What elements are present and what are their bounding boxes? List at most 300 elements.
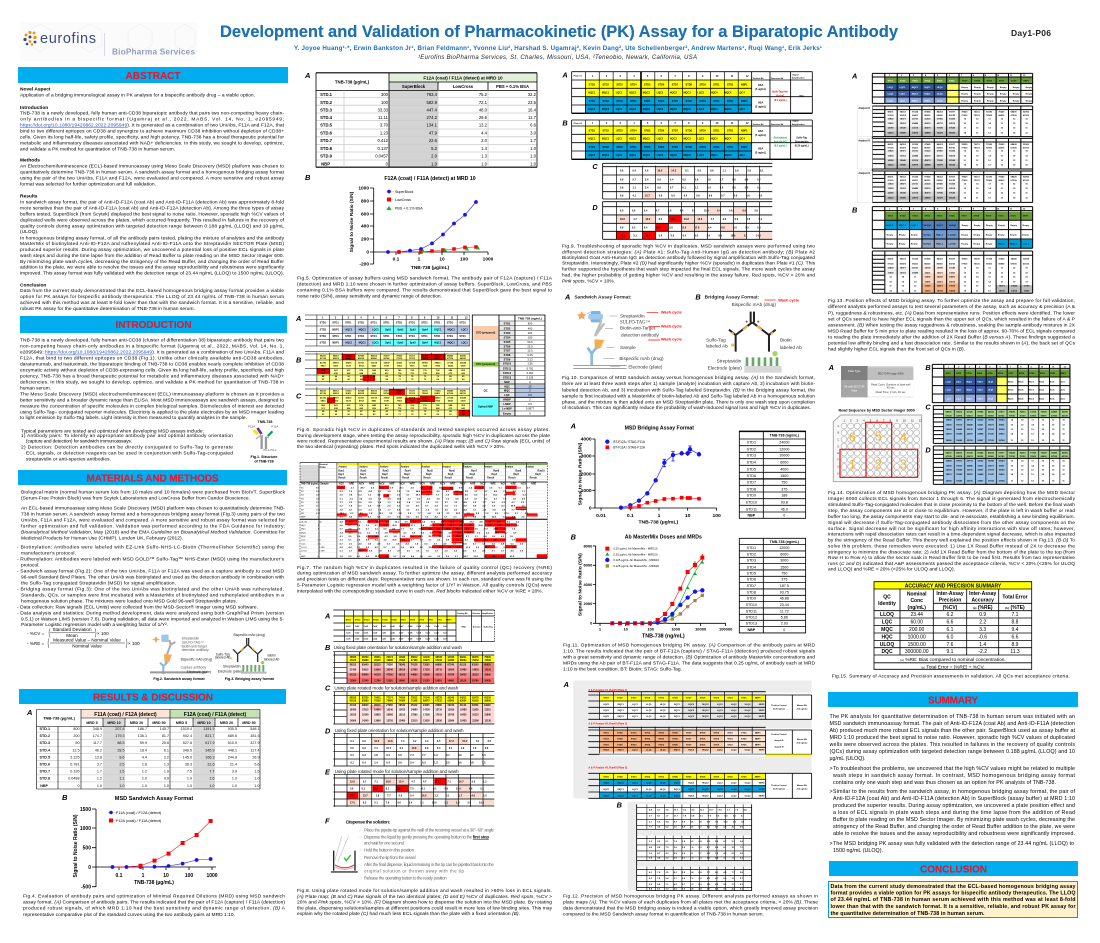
figure 10B: bridging assay diagram: labeled Ab [706, 343, 728, 348]
table: bridging standards A: STD10 [746, 500, 757, 504]
panel: raw signal plates A: 13 12 14 11 10 12 [964, 187, 1029, 190]
caption: figure 8: 20% and Pink spots, %CV > 10%. (F) Diagram shows how to dispense the solution into the MSD plate. By rotating [297, 900, 552, 906]
figure 5A: assay buffer table: 0.412 [378, 138, 389, 143]
panel: read sequence plate: 4 [900, 430, 907, 444]
chart: Ab MasterMix doses and MRDs: B [571, 532, 577, 541]
table: bridging standards B: NBP [747, 628, 756, 632]
panel: plate map A: HSA [758, 84, 763, 87]
figure 5A: assay buffer table: 274.2 [427, 115, 438, 120]
figure 4A: table of MRD comparison: 50 [75, 741, 80, 745]
panel: plate raw signals C: 19310 19140 18820 18560 18215 17880 17390 17015 16760 16420 16115 15890 [350, 713, 492, 716]
figure 7: accuracy and precision runs table: S2 400 [301, 491, 320, 493]
panel: plate key table: STD12 [503, 371, 512, 375]
panel: plate raw signals C: 18430 17815 16960 16240 15610 14980 14250 13710 13050 12480 11920 11310 [350, 709, 491, 712]
panel: plate map B: LLQ1 LQC1 MQC1 HQC1 ULQ1 [946, 381, 994, 383]
panel: read sequence plate: 3 [900, 458, 907, 472]
figure 7: accuracy and precision runs table: S7 12.5 [301, 509, 321, 511]
text block: abstract: (ULOQ). [20, 229, 38, 235]
figure 7: accuracy and precision runs table: S3 200 [301, 495, 320, 497]
figure 4B: MSD sandwich assay chart: 100 [185, 873, 193, 879]
panel: read sequence plate: 6 [849, 430, 856, 444]
panel: plate map A: LLQ1 LQC1 MQC1 HQC1 ULQ1 [888, 87, 943, 89]
figure 2: sandwich assay format: Streptavidin [182, 636, 199, 640]
figure 5A: assay buffer table: 5.2 [431, 146, 438, 151]
caption: figure 14: stimulated Sulfo-Tag-conjugated molecules that in close proximity to the bottom of the well. Before the final wash [828, 502, 1075, 508]
panel: plate map A: Cal1 Cal2 Cal3 Cal4 Cal5 Cal6 Cal7 Cal8 Cal9 Cal1 Cal1 Cal1 [346, 631, 448, 634]
panel: plate raw signals C: C [325, 684, 331, 693]
chart: Ab MasterMix doses and MRDs: TNB-738 (ng/mL) [642, 634, 685, 640]
panel: read card A: 96-well SECTOR [844, 385, 864, 389]
caption: figure 14: by the stringency of the Read Buffer. This theory well explained the position effects shown in Fig.13. (B-D) To [828, 538, 1075, 544]
caption: figure 13: had slightly higher ECL signals than the front set of QCs in (B). [828, 347, 965, 353]
panel: plate map B: (5 ug/mL) [755, 134, 766, 137]
figure 4A: table of MRD comparison: NBP [40, 784, 49, 788]
text block: materials and methods: 9.5.1) or Watson LIMS (version 7.6). During validation, all data were imported and analyzed in Watson LIMS using the 5- [21, 617, 284, 623]
panel: plate key table: STD8 [504, 353, 511, 357]
panel: plate map B [925, 363, 1070, 403]
figure 4A: table of MRD comparison: A [26, 708, 32, 717]
table: bridging standards A: 0 [783, 514, 785, 518]
panel: plate map A: STD1 STD2 STD3 STD4 STD5 STD6 STD7 STD8 STD9 STD1 STD1 NBP1 [589, 83, 748, 86]
figure 4B: MSD sandwich assay chart: MSD Sandwich Assay Format [115, 796, 193, 802]
figure 7: accuracy and precision runs table: 3.3 6.1 2.8 4.9 5.4 3.2 35.6 2.5 4.7 6.3 3.1 2.6 5.8 41.2 4.4 30.7 29.3 34.1 3.7 2.9 [340, 539, 516, 542]
figure 4A: table of MRD comparison: 1.2 [97, 777, 102, 781]
panel: plate key table: 0 [529, 380, 531, 384]
figure 5A: assay buffer table: 300 [381, 92, 389, 97]
text block: abstract: and validate a PK method for quantitation of TNB-738 in human serum. [20, 146, 175, 152]
figure 4A: table of MRD comparison: 1.0 [119, 784, 124, 788]
panel: plate map A: STD2 NBP1 HQC1 MQC1 LQC1 Spk1 Spk2 Spk3 Spk4 HQC1 MQC1 LQC1 [320, 328, 468, 331]
panel: raw signal plates A: 13 12 14 11 10 12 [964, 122, 1029, 125]
heading: abstract [18, 67, 288, 83]
figure 15: accuracy and precision summary table: 6.2 [947, 612, 954, 618]
chart: MSD bridging assay format: 1 [658, 513, 661, 519]
panel: plate map A: Sentinel Ab [753, 77, 764, 80]
figure 15: accuracy and precision summary table: QC [883, 594, 891, 600]
panel: plate key table: STD3 [504, 331, 511, 335]
table: bridging standards B: 375 [781, 578, 787, 582]
figure 10B: bridging assay diagram: B [695, 292, 701, 301]
caption: figure 14: step, the assay components are at or close to equilibrium. However, if the plate is left in wash buffer or read [828, 508, 1075, 514]
figure 7: accuracy and precision runs table: %CV %RE %CV %RE %CV %RE %CV %RE %CV %RE %CV %RE %CV %RE %CV %RE %CV %RE %CV %RE [339, 483, 537, 485]
panel: plate map A: 1 2 3 4 5 6 7 8 9 10 11 12 [322, 317, 468, 320]
text block: materials and methods: further optimization and full validation. Validation was performed according to the FDA Guidance for Industry: [21, 523, 285, 529]
figure 4A: table of MRD comparison: 145.0 [183, 755, 192, 759]
chart: MSD bridging assay format: MSD Bridging Assay Format [625, 425, 694, 431]
figure 4B: MSD sandwich assay chart: Signal to Noise Ratio (S/N) [73, 814, 79, 878]
table: bridging standards B: 93.75 [780, 590, 789, 594]
panel: plate key table: 12.5 [527, 349, 533, 353]
text block: summary: able to resolve the issues and the assay reproducibility and robustness were significantly improved. [833, 831, 1075, 837]
panel: plate raw signals B: 12560 12140 11780 11320 10960 10510 10120 19830 19460 19120 18790 18430 [350, 679, 491, 682]
panel: plate raw signals B: B [325, 643, 331, 652]
caption: figure 4: assay format. (A) Comparison of antibody pairs. The results indicated that the pair of F12A (capture) / F11A (detection) [23, 900, 285, 906]
panel: raw signals C: 14180 19640 22310 14567 17183 19764 [946, 428, 1005, 431]
figure 5A: assay buffer table: 1.4 [481, 146, 488, 151]
text block: abstract: https://doi.org/10.1080/19420862.2022.2095949). It is generated as a combination of two UniAbs, F11A and F12A, that [20, 122, 285, 128]
panel: plate key table: STD13 [503, 375, 512, 379]
panel: plate key table: 50.0 [527, 340, 533, 344]
figure 4A: table of MRD comparison: 12.5 [72, 748, 80, 752]
panel: %CV E [325, 767, 494, 806]
caption: figure 11: 1:10 is the best condition. BT: Biotin; STAG: Sulfo-Tag. [563, 667, 682, 673]
table: bridging standards B: 0 [783, 628, 785, 632]
caption: figure 7: and precision tests on different days. Representative runs are shown. In each run, standard curve was fit using the [297, 577, 552, 583]
figure 1: TNB-738 structure: F11A [272, 424, 278, 428]
panel: plate raw signals B: 46535 38720 26431 20174 14530 08612 03140 98726 90345 86211 80476 75320 [350, 656, 492, 659]
panel: plate map A: Empty Empty Empty Empty Empty Empty [961, 93, 1033, 96]
text block: materials and methods: - Data collection: Raw signals (ECL Units) were collected from the MSD-Sector® Imager using MSD software. [17, 604, 258, 611]
panel: plate map A: STD2 NBP1 HQC1 MQC1 LQC1 Spk1 Spk2 Spk3 Spk4 HQC1 MQC1 LQC1 [320, 342, 468, 345]
figure 10B: bridging assay diagram: Wash cycle [778, 298, 799, 302]
panel: raw signals D: D [925, 446, 931, 455]
table: bridging standards B: STD12 [746, 615, 757, 619]
table: bridging standards A: STD8 [747, 487, 756, 491]
callout: conclusion box [828, 882, 1078, 918]
table: bridging standards B: STD11 [746, 610, 757, 614]
figure 5A: assay buffer table: STD.9 [320, 154, 333, 158]
figure 5A: assay buffer table: LowCross [453, 84, 474, 89]
panel: plate map A: A [295, 314, 301, 323]
heading: summary [828, 692, 1078, 707]
panel: dispensing instructions F: original solution or thrown away with the tip [364, 868, 465, 873]
caption: figure 4: Fig.4. Evaluation of antibody pairs and optimization of Minimal Required Dilutions (MRD) using MSD sandwich [23, 894, 285, 900]
panel: %CV E: 15.0 6.7 7.1 18.8 15.4 4.7 4.7 24.6 7.1 16.7 5.0 1.2 [350, 780, 487, 783]
text block: abstract: By minimizing plate wash cycles, decreasing the stringency of the Read Buffer, and changing the order of Read Buffer [20, 259, 284, 265]
figure 4A: table of MRD comparison: 902.4 [183, 734, 192, 738]
panel: raw signals C: 97 93 90 86 83 80 77 75 72 69 67 64 [322, 413, 465, 416]
figure 4A: table of MRD comparison: 381.5 [250, 734, 260, 738]
panel: raw signal plates A: 12 14 11 13 12 10 [964, 182, 1029, 185]
panel: plate map A: STD1 STD1 STD1 STD1 STD1 STD1 STD1 STD1 STD1 STD1 STD1 STD1 [320, 335, 466, 338]
panel: plate map A: Plate #1 [574, 74, 583, 77]
caption: figure 6: Fig.6. Sporadic high %CV in duplicates of standards and tested samples occurred across assay plates. [297, 427, 550, 433]
caption: figure 12: plate maps (A). The %CV values of each duplicates from all plates met the acceptance criteria, < 20% (B). These [563, 900, 818, 906]
chart: Ab MasterMix doses and MRDs: Signal to Noise Ratio (S/N) [578, 553, 584, 616]
figure 7: accuracy and precision runs table: Run1 Run2 Run3 Run4 Run5 Run6 Run7 Run8 Run9 Run10 [338, 469, 545, 472]
figure 5A: assay buffer table: 16.4 [528, 108, 537, 112]
figure 5A: assay buffer table: 1.0 [431, 162, 438, 166]
text block: materials and methods: - Sandwich assay format (Fig.2): One of the two UniAbs, F11A or F12A was used as a capture antibody to coat MSD [17, 569, 284, 575]
chart: Ab MasterMix doses and MRDs: 0.25 µg/mL Ab MasterMix - MRD20 [613, 552, 658, 556]
figure 15: accuracy and precision summary table [874, 582, 1032, 670]
panel: plate raw signals B: 88312 85940 82115 79260 76540 74120 72005 69880 67240 65110 63350 60920 [350, 663, 491, 666]
table: bridging standards B [739, 538, 806, 633]
panel: raw signal plates A: 98231 94512 91320 87645 84412 81977 78520 76211 73180 70650 68400 52900 [887, 143, 1030, 146]
panel: plate key table: STD (prepared) [476, 362, 495, 366]
figure 11: bridging charts and tables [570, 421, 806, 640]
text block: materials and methods: - Ruthenylation: Antibodies were labeled with MSD GOLD™ Sulfo-Tag™ NHS-Ester (MSD) using the manufacturer's [17, 557, 285, 563]
chart: MSD bridging assay format: 0.1 [627, 513, 634, 519]
panel: plate key table: STD (prepared) [476, 331, 495, 335]
figure 4A: table of MRD comparison: 1.9 [187, 777, 192, 781]
panel: raw signals B: 98 94 91 87 84 81 78 76 73 70 68 65 [322, 375, 465, 378]
panel: plate maps A: Master Mix [797, 738, 808, 741]
text block: introduction: F12A, that bind to two different epitopes on CD38 (Fig.1). Unlike other clinically available anti-CD38 antibodies, [20, 356, 284, 362]
panel: read sequence plate: A [837, 424, 839, 428]
figure 7: accuracy and precision runs table: Day1 Day1 Day2 Day2 Day3 Day3 Day4 Day4 Day5 Day5 [338, 473, 541, 476]
text block: introduction: non-competing heavy chain-only antibodies in a bispecific format (Ugamraj et al., 2022, MABS, Vol. 14, No. 1, [20, 344, 284, 350]
panel: plate map B: Signal [792, 121, 799, 123]
figure 5A: assay buffer table: 11.7 [528, 115, 537, 120]
figure 3: bridging assay format: Streptavidin [223, 665, 241, 669]
text block: abstract: produced superior results. During assay optimization, we uncovered a potential loss of positive ECL signals in plate [20, 247, 284, 253]
panel: raw signal plates A: 14180 19640 22310 45670 71830 97640 [887, 127, 956, 130]
figure 7: accuracy and precision runs table: 3.1 5.4 2.8 4.7 6.5 -1.7 3.9 2.4 5.6 1.3 4.2 3.7 2.1 -2.9 6.4 1.8 24.6 3.2 5.5 2.6 [340, 516, 525, 519]
panel: read sequence plate: F [837, 458, 839, 462]
caption: figure 14: Signal will decrease if Sulfo-Tag-conjugated antibody dissociates from the other assay components on the [828, 520, 1075, 526]
panel: dispensing instructions F: ○ [359, 848, 362, 853]
panel: raw signal plates A [857, 106, 1033, 202]
logo: Eurofins BioPharma Services: eurofins [40, 31, 96, 47]
panel: %CV E: 5.6 5.1 28.4 6.1 26.5 7.5 6.1 6.1 6.6 15.0 5.6 5.1 [350, 787, 484, 790]
caption: figure 14: runs (C and D) indicated that A&P assessments passed the acceptance criteria, %CV < 20% (<25% for ULOQ [828, 561, 1075, 567]
panel: plate map B [562, 118, 812, 159]
figure 4A: table of MRD comparison: 2.5 [119, 762, 124, 766]
figure 5A: assay buffer table: A [304, 71, 310, 80]
caption: figure 15: Fig.15. Summary of Accuracy and Precision assessments in validation. All QCs met acceptance criteria. [832, 674, 1070, 680]
figure 15: accuracy and precision summary table: Inter-Assay [969, 591, 997, 597]
panel: plate raw signals C: 85120 82980 78105 76660 74090 71188 69975 67233 65860 63034 61552 59690 [350, 699, 492, 702]
caption: figure 9: Pink spots, %CV > 10%. [562, 279, 615, 285]
caption: figure 4: representative comparative plot of the standard curves using the two antibody pairs at MRD 1:10. [23, 912, 235, 918]
panel: raw signals C: 98231 94512 91320 87645 84412 81977 78520 76211 73180 70654 68440 65290 [320, 389, 467, 392]
chart: Ab MasterMix doses and MRDs: 1000 [671, 627, 681, 632]
panel: plate maps A: A & P Analyst #3, Run#3 (Plate 3) [588, 767, 627, 770]
panel: raw signals C: 12 14 11 13 12 10 [1011, 419, 1066, 422]
figure 15: accuracy and precision summary table: Precision [939, 598, 961, 604]
text block: materials and methods: 96-well Standard Bind Plates. The other UniAb was biotinylated and used as the detection antibody in combination with [21, 575, 284, 581]
figure 6: plates and standards table [295, 314, 545, 417]
text block: introduction: streptavidin or anti-species antibodies. [26, 457, 111, 463]
text block: abstract: In sandwich assay format, the pair of Anti-ID-F12A (coat Ab) and Anti-ID-F11A (detection Ab) was approximately 8-fold [20, 199, 284, 205]
text block: abstract: robust PK assay for the quantitative determination of TNB-738 in human serum. [20, 306, 195, 312]
formulas: %CV and %RE: - %CV = [27, 631, 45, 636]
text block: summary: wells were observed across the plates. This resulted in failures in the recovery of quality controls [830, 742, 1075, 748]
panel: plate map B: 1 2 3 4 5 6 7 8 9 10 11 12 [948, 365, 1067, 368]
figure 15: accuracy and precision summary table: 7.6 [947, 642, 954, 648]
figure 10B: bridging assay diagram: Electrode (plate) [708, 365, 742, 370]
panel: %CV E: 17.0 6.3 5.1 7.6 4.6 5.4 5.1 15.6 5.1 1.8 5.6 15.8 [350, 801, 484, 804]
figure 7: accuracy and precision runs table: 5.1 3.7 29.6 2.4 6.8 4.1 2.9 5.5 3.6 1.9 4.7 3.2 6.4 2.6 5.3 4.8 3.1 2.7 4.9 3.8 [340, 550, 524, 553]
figure 2: sandwich assay format: Biotin-anti-Target [182, 644, 207, 648]
figure 4A: table of MRD comparison: 21.4 [230, 762, 237, 766]
figure 7: accuracy and precision runs table: 4.3 1.2 5.8 -2.4 2.1 3.6 7.4 1.9 24.8 -3.5 6.6 4.1 5.2 2.8 3.1 -1.7 4.9 2.2 6.4 1.1 [340, 490, 526, 493]
caption: figure 9: Biotinylated Goat Anti-Human IgG as detection antibody followed by signal amplification with Sulfo-Tag conjugated [562, 255, 815, 261]
panel: raw signal plates A: 97120 93874 90411 86530 83960 80742 77810 75123 72900 69810 67500 43100 [887, 179, 1030, 182]
panel: plate maps A: HQC1 MQC1 LQC1 LLQ1 ULQ1 DQC1 HQC2 MQC2 LQC2 LLQ2 ULQ2 NBP2 [603, 795, 765, 797]
text block: abstract: wash steps and during the time lapse from the addition of Read Buffer to plate reading on the MSD Sector Imager 600. [20, 253, 284, 259]
figure 4B: MSD sandwich assay chart: 10 [163, 873, 169, 879]
figure 1: TNB-738 structure: of TNB-738 [254, 460, 274, 464]
panel: raw signal plates A: 14 11 13 12 14 12 [964, 164, 1029, 167]
panel: raw signals B: 98231 94512 91320 87645 84412 81977 78520 76211 73180 70654 68440 65290 [320, 354, 467, 357]
panel: plate map A: A [561, 70, 568, 79]
text block: materials and methods: (Serum-Free Protein Block) was from Scytek Laboratories and LowCross Buffer from Candor Bioscience. [21, 496, 250, 502]
figure 4A: table of MRD comparison: MRD 50 [242, 721, 256, 725]
figure 4A: table of MRD comparison: 7.7 [209, 770, 214, 774]
panel: raw signal plate B: 13 12 14 [889, 280, 917, 283]
figure 1: TNB-738 structure [248, 420, 278, 464]
figure 4A: table of MRD comparison: MRD 20 [220, 721, 233, 725]
table: bridging standards A: STD6 [747, 474, 756, 478]
panel: dispensing instructions F: Dispense the liquid by gently pressing the operating button to the first stop [364, 834, 489, 839]
panel: raw signal plates A: 13920 19012 20480 42310 66710 92510 [887, 122, 956, 125]
chart: MSD bridging assay format: BT-F12A / STAG-F11A [613, 440, 646, 444]
figure 4B: MSD sandwich assay chart: 1000 [80, 826, 91, 832]
panel: raw signal plate B: 14 11 13 [889, 290, 917, 293]
chart: MSD bridging assay format: 1000 [581, 488, 592, 494]
text block: abstract: Data from the current study demonstrated that the ECL-based homogenous bridging assay format provides a viable [20, 288, 284, 294]
figure 5A: assay buffer table: STD.7 [320, 138, 333, 143]
figure 5A: assay buffer table: 1.3 [481, 154, 488, 158]
caption: figure 10: labeled detection Ab, and 3) incubation with Sulfo-Tag labeled Streptavidin. (B) In the Bridging assay format, the [562, 388, 815, 394]
figure 4A: table of MRD comparison: 1.0 [142, 777, 147, 781]
panel: plate map A: 1 2 3 4 5 6 7 8 9 10 11 12 [592, 75, 749, 78]
figure 4A: table of MRD comparison: 136.1 [138, 734, 147, 738]
text block: summary: MRD 1:10 produced the best signal to noise ratio. However, sporadic high %CV values of duplicated [830, 735, 1075, 741]
panel: %CV D: Using fixed plate orientation for solution/sample addition and wash [335, 728, 464, 733]
text block: introduction: 2) Detection: Detection antibodies can be directly conjugated to Sulfo-Tag to generate [21, 445, 233, 451]
text block: introduction: (capture and detection) for sandwich immunoassays. [26, 439, 132, 445]
chart: Ab MasterMix doses and MRDs: 100 [647, 627, 655, 632]
table: bridging standards A [739, 431, 806, 518]
figure 7: accuracy and precision runs table: Sample [320, 483, 329, 485]
figure 5A: assay buffer table: 1.0 [530, 146, 537, 151]
panel: plate key table: Spiked NBP [478, 405, 493, 409]
caption: figure 12: Fig.12. Precision of MSD homogenous bridging PK assay. Different analysts performed assays as shown in [563, 894, 818, 900]
figure 10B: bridging assay diagram: Bridging Assay Format: [705, 294, 760, 300]
figure 4A: table of MRD comparison: 548.1 [250, 727, 260, 731]
panel: plate maps A: HQC1 MQC1 LQC1 LLQ1 ULQ1 DQC1 HQC2 MQC2 LQC2 LLQ2 ULQ2 NBP2 [603, 789, 765, 791]
figure 4A: table of MRD comparison: STD.8 [40, 777, 50, 781]
table: bridging standards A: STD11 [746, 507, 757, 511]
figure 10A: sandwich assay diagram: Biotin-anti-Target [620, 326, 656, 331]
panel: plate map B: Anti-Hu-IgG [774, 141, 787, 144]
text block: abstract: duplicated wells were observed across the plates, which occurred frequently. This resulted in failures in the recovery of [20, 217, 285, 223]
panel: plate map A: HQC1 MQC1 LQC1 HQC2 MQC2 LQC2 HQC3 MQC3 LQC3 HQC4 MQC4 LQC4 [588, 108, 745, 111]
panel: raw signals B: 971 938 904 865 839 807 778 751 729 698 675 643 [321, 372, 466, 375]
text block: introduction [20, 338, 284, 463]
figure 5A: assay buffer table: 1.7 [530, 138, 537, 143]
chart: Ab MasterMix doses and MRDs: 0.125 µg/mL Ab MasterMix - MRD10 [613, 558, 659, 562]
panel: raw signals D [925, 446, 1070, 484]
figure 4A: table of MRD comparison: 13.8 [95, 755, 102, 759]
panel: raw signals B: 9823 9412 9120 8764 8441 8197 7852 7621 7318 7065 6844 6529 [321, 365, 466, 368]
panel: plate map B: STD1 STD2 STD3 STD4 STD5 STD6 STD7 STD8 STD9 STD1 STD1 NBP1 [888, 215, 1029, 218]
panel: plate maps A: Positive Control [771, 784, 787, 787]
panel: raw signals C: 9823 9412 9120 8764 8441 8197 7852 7621 7318 7065 6844 6529 [321, 400, 466, 403]
figure 4A: table of MRD comparison: 117.4 [251, 748, 260, 752]
text block: materials and methods: Medicinal Products for Human Use (CHMP). London UK, February (2012). [21, 536, 183, 542]
caption: figure 11 [563, 643, 816, 673]
panel: dispensing instructions F: ○ [359, 834, 362, 839]
caption: figure 14: and LLOQ) and %RE < 20% (<25% for ULOQ and LLOQ). [828, 567, 955, 573]
figure 2: sandwich assay format [150, 635, 212, 681]
figure 7: accuracy and precision runs table: S4 100 [301, 498, 320, 500]
caption: figure 12 [563, 894, 818, 918]
figure 4B: MSD sandwich assay chart: -500 [81, 884, 91, 890]
panel: plate raw signals B [325, 643, 494, 683]
caption: figure 9 [562, 243, 816, 285]
panel: plate map B: Blank Blank Blank Blank Blank Blank [1008, 398, 1066, 400]
text block: introduction: e2095949; https://doi.org/10.1080/19420862.2022.2095949). It is generated as a combination of two UniAbs, F11A and [20, 350, 284, 356]
panel: raw signal plate B: 13920 19012 20480 14231 16671 19251 [887, 271, 956, 274]
panel: plate maps A: Positive Control [771, 704, 787, 707]
table: bridging standards A: 375 [781, 487, 787, 491]
text block: materials and methods: UniAbs, F11A and F12A, were evaluated and compared. A more sensitive and robust assay format was selected for [21, 517, 285, 523]
caption: figure 14: Row H to Row A) to allow the sector soak in Read Buffer first to be read first. Results from two representative [828, 555, 1075, 561]
panel: plate key table: 0.195 [527, 375, 534, 379]
panel: raw signal plate B: 12 14 11 13 12 10 [964, 267, 1029, 270]
panel: raw signal plates A: 14180 19640 22310 45670 71830 97640 [887, 192, 956, 195]
table: bridging standards B: STD5 [747, 571, 756, 575]
panel: %CV C [592, 162, 772, 199]
panel: plate map A: STD7 STD8 STD9 STD1 STD1 NBP1 [962, 80, 1030, 82]
panel: %CV D: 6.6 6.5 6.4 30.7 5.6 13.6 17.6 6.4 16.6 5.6 5.5 6.6 [620, 226, 761, 229]
text block: summary: > [830, 789, 833, 795]
panel: raw signal plate B: 13240 14871 19520 [924, 285, 956, 288]
panel: plate key table: STD7 [504, 349, 511, 353]
chart: Ab MasterMix doses and MRDs: Ab MasterMix Doses and MRDs [625, 535, 702, 541]
figure 7: accuracy and precision runs table: 2.9 3.8 6.2 1.5 4.4 -2.1 3.6 5.1 28.3 2.6 7.3 -1.9 2.8 4.6 5.5 1.3 26.2 3.4 2.7 5.2 [340, 494, 526, 497]
panel: raw signal plate B: 13820 18971 20731 14122 16785 19143 [887, 267, 956, 270]
figure 4B: MSD sandwich assay chart: 500 [83, 846, 91, 852]
title: Development and Validation of Pharmacokinetic (PK) Assay for a Biparatopic Antibody [220, 23, 899, 41]
formulas: %CV and %RE: Mean [66, 633, 78, 638]
figure 1: TNB-738 structure: HC-1 HC-2 [263, 448, 277, 452]
figure 5B: assay buffer chart: 1000 [483, 256, 494, 262]
figure 4A: table of MRD comparison: 0.781 [70, 762, 80, 766]
panel: dispensing instructions F: Remove the tip from the vessel [364, 855, 416, 860]
figure 4A: table of MRD comparison: STD.5 [40, 755, 50, 759]
panel: read sequence plate: 1 [849, 458, 856, 472]
panel: plate maps A: Sample A [774, 739, 784, 742]
text block: summary: > [830, 841, 833, 847]
figure 5A: assay buffer table: STD.8 [320, 146, 333, 151]
caption: figure 4 [23, 894, 286, 918]
figure 4A: table of MRD comparison: 18.4 [140, 748, 147, 752]
figure 4A: table of MRD comparison: MRD 10 [197, 721, 211, 725]
figure 4A: table of MRD comparison: 617.9 [205, 741, 214, 745]
figure 5A: assay buffer table: 33.33 [378, 108, 389, 112]
panel: plate key table: 0.391 [527, 371, 534, 375]
panel: %CV D: 6.1 6.4 1.4 6.4 5.6 5.4 6.3 1.3 2.5 5.6 4.8 7.5 [350, 761, 486, 764]
table: bridging standards B: 23.44 [780, 603, 789, 607]
figure 5A: assay buffer table: 100 [381, 100, 389, 105]
text block: summary: 1500 ng/mL (ULOQ). [833, 848, 883, 854]
heading: conclusion [829, 861, 1078, 876]
figure 3: bridging assay format: Electrode (plate) [218, 670, 242, 674]
figure 5A: assay buffer table: 13.2 [479, 122, 488, 128]
text block: abstract [20, 87, 285, 312]
figure 4A: table of MRD comparison: 6.1 [164, 748, 169, 752]
caption: figure 10: sample is first incubated with a MasterMix of biotin-labeled Ab and Sulfo-Tag labeled Ab in a homogenous solution [562, 393, 815, 399]
caption: figure 10: of incubation. This can significantly reduce the probability of wash-induced signal loss and high %CV in duplicates. [562, 405, 811, 411]
panel: plate map B: B [562, 118, 568, 127]
figure 7: accuracy and precision runs table: MQC 2 [301, 532, 320, 534]
text block: introduction: using Sulfo-Tag– conjugated reporter molecules. Electricity is applied to the plate electrodes by an MSD imager leading [20, 409, 284, 415]
figure 4A: table of MRD comparison: 8.6 [119, 755, 124, 759]
figure 15: accuracy and precision summary table: 9.4 [1012, 627, 1019, 633]
table: bridging standards A: TNB-738 (ng/mL) [770, 433, 800, 437]
panel: read sequence plate: H [837, 471, 839, 475]
text block: abstract: more sensitive than the pair of Anti-ID-F11A (coat Ab) and Anti-ID-F12A (detection Ab). Among the three types of assay [20, 205, 285, 211]
panel: read sequence plate: 2 [875, 458, 882, 472]
panel: dispensing instructions F: ○ [359, 828, 362, 833]
panel: plate key table: QC [484, 388, 488, 392]
chart: Ab MasterMix doses and MRDs: 2000 [583, 601, 593, 606]
